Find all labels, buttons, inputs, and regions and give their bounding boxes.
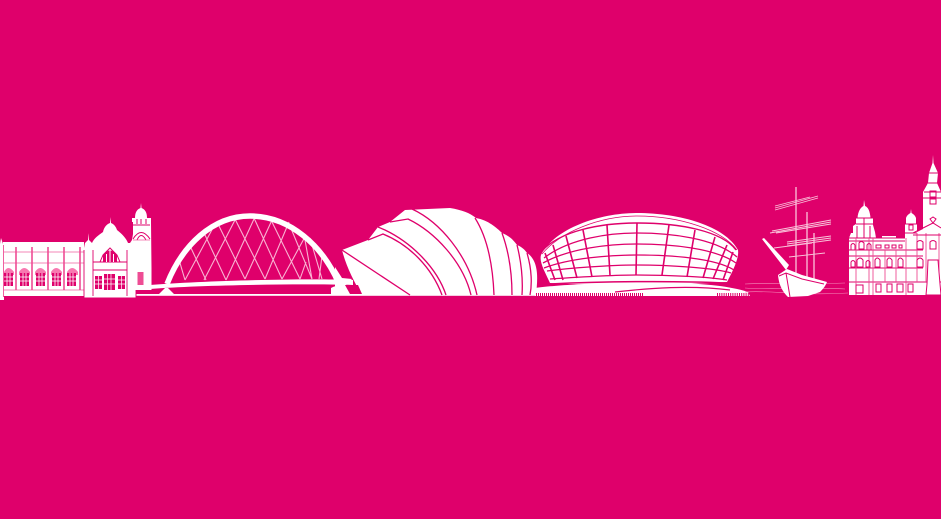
bridge deck bbox=[150, 279, 353, 289]
ship hull bbox=[778, 269, 827, 297]
city chambers monument bbox=[926, 260, 941, 295]
ship bowsprit bbox=[762, 238, 789, 270]
icon: city chambers building on the right bbox=[849, 155, 941, 295]
bridge arch bbox=[167, 216, 339, 284]
icon: curved armadillo auditorium bbox=[335, 208, 537, 295]
bridge lattice bbox=[180, 218, 322, 280]
icon: arched bridge bbox=[150, 216, 353, 294]
icon: tall ship bbox=[745, 187, 848, 297]
ship water lines bbox=[745, 283, 848, 294]
icon: domed arena bbox=[535, 213, 750, 296]
icon: museum building on the left bbox=[0, 203, 152, 300]
city chambers windows bbox=[851, 191, 936, 267]
arena roof and facade bbox=[541, 213, 738, 285]
ship rigging yards bbox=[770, 196, 831, 257]
arena base bbox=[535, 282, 750, 296]
ground line bbox=[136, 294, 540, 296]
ship masts bbox=[796, 187, 814, 284]
